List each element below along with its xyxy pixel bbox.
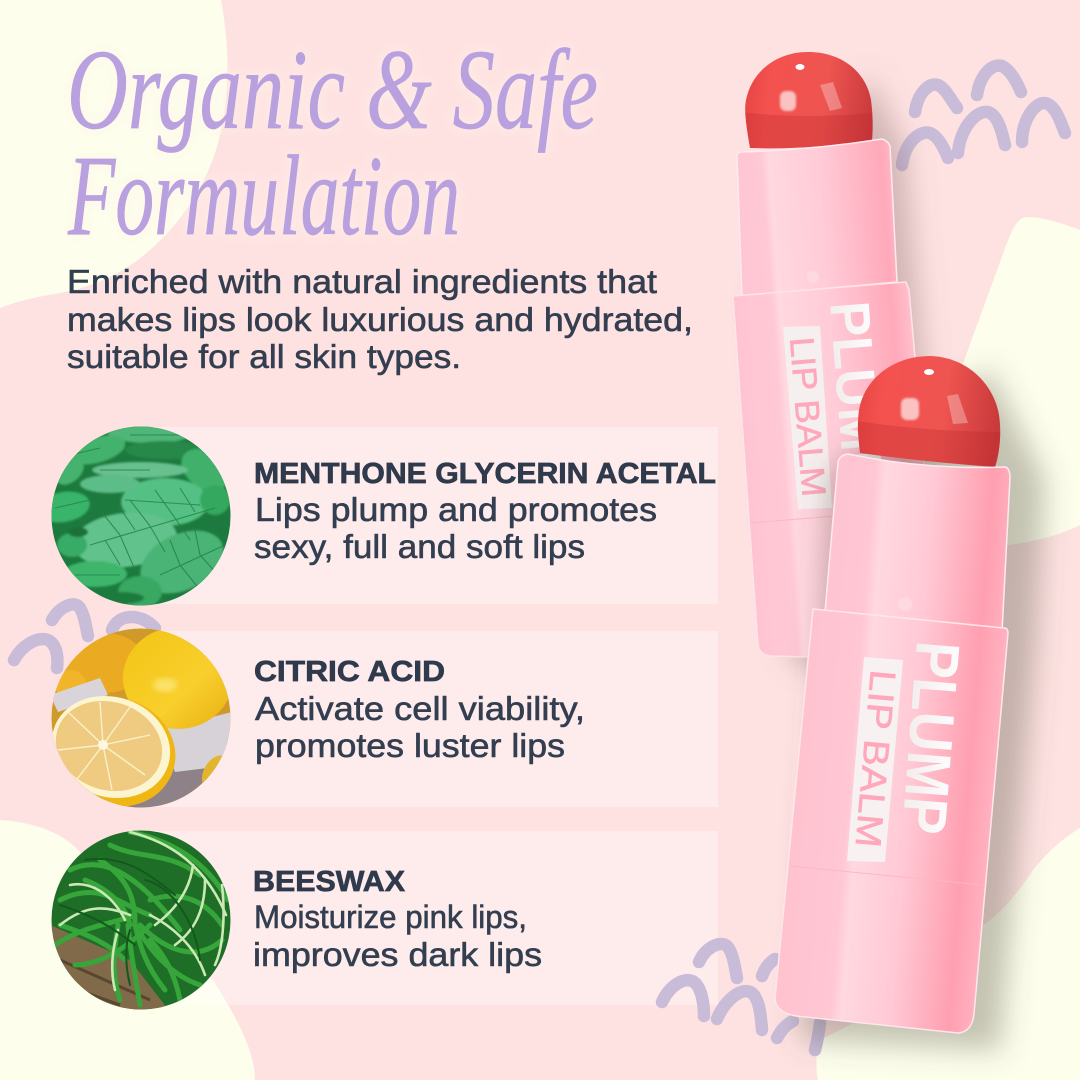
back balm inner tube [737,139,897,296]
ingredient 1: menthone glycerin acetal text [254,458,716,565]
product: back lip balm [733,48,940,680]
photo: mint leaves [52,426,230,606]
back balm plump label: PLUMP [818,299,895,488]
back balm seam [750,508,935,523]
shadow: front lip balm [800,370,1045,1050]
photo: rosemary [50,828,232,1012]
ingredient 3: beeswax text: BEESWAX [253,866,406,898]
ingredient 2: citric acid text: promotes luster lips [255,727,565,764]
back balm outer case [733,282,940,657]
shadow: back lip balm [760,75,935,680]
ingredient 2: citric acid text: Activate cell viability, [255,690,585,727]
ingredient 2: citric acid text [254,656,585,764]
ingredient 3: beeswax text [253,866,542,973]
ingredient 3: beeswax text: Moisturize pink lips, [254,899,527,935]
front balm outer case [775,609,1008,1033]
ingredient 1: menthone glycerin acetal text: Lips plump and promotes [255,491,657,528]
title: Organic & Safe [67,26,598,153]
decorative squiggles: top right [902,66,1065,165]
ingredient 1: menthone glycerin acetal text: sexy, full and soft lips [254,528,585,565]
product: front lip balm [775,350,1045,1050]
intro paragraph [67,263,693,375]
back balm lip balm label: LIP BALM [782,336,832,498]
intro paragraph: makes lips look luxurious and hydrated, [67,301,693,338]
front balm bullet [858,356,1000,467]
ingredient 2: citric acid text: CITRIC ACID [254,656,445,688]
front balm lip balm label: LIP BALM [848,668,904,849]
front balm plump label: PLUMP [888,639,972,837]
front balm inner tube [825,454,1010,632]
ingredient panels background [141,427,718,1005]
decorative squiggles: bottom [662,944,820,1050]
ingredient 1: menthone glycerin acetal text: MENTHONE GLYCERIN ACETAL [254,458,716,490]
front balm case seam [790,866,983,885]
intro paragraph: suitable for all skin types. [67,338,461,375]
back balm bullet [745,52,873,148]
product highlights [780,64,968,611]
ingredient 3: beeswax text: improves dark lips [253,936,542,973]
intro paragraph: Enriched with natural ingredients that [67,263,657,300]
title: Formulation [67,132,460,259]
photo: lemons [52,628,230,808]
title [67,26,598,259]
decorative squiggles: left [14,604,155,668]
